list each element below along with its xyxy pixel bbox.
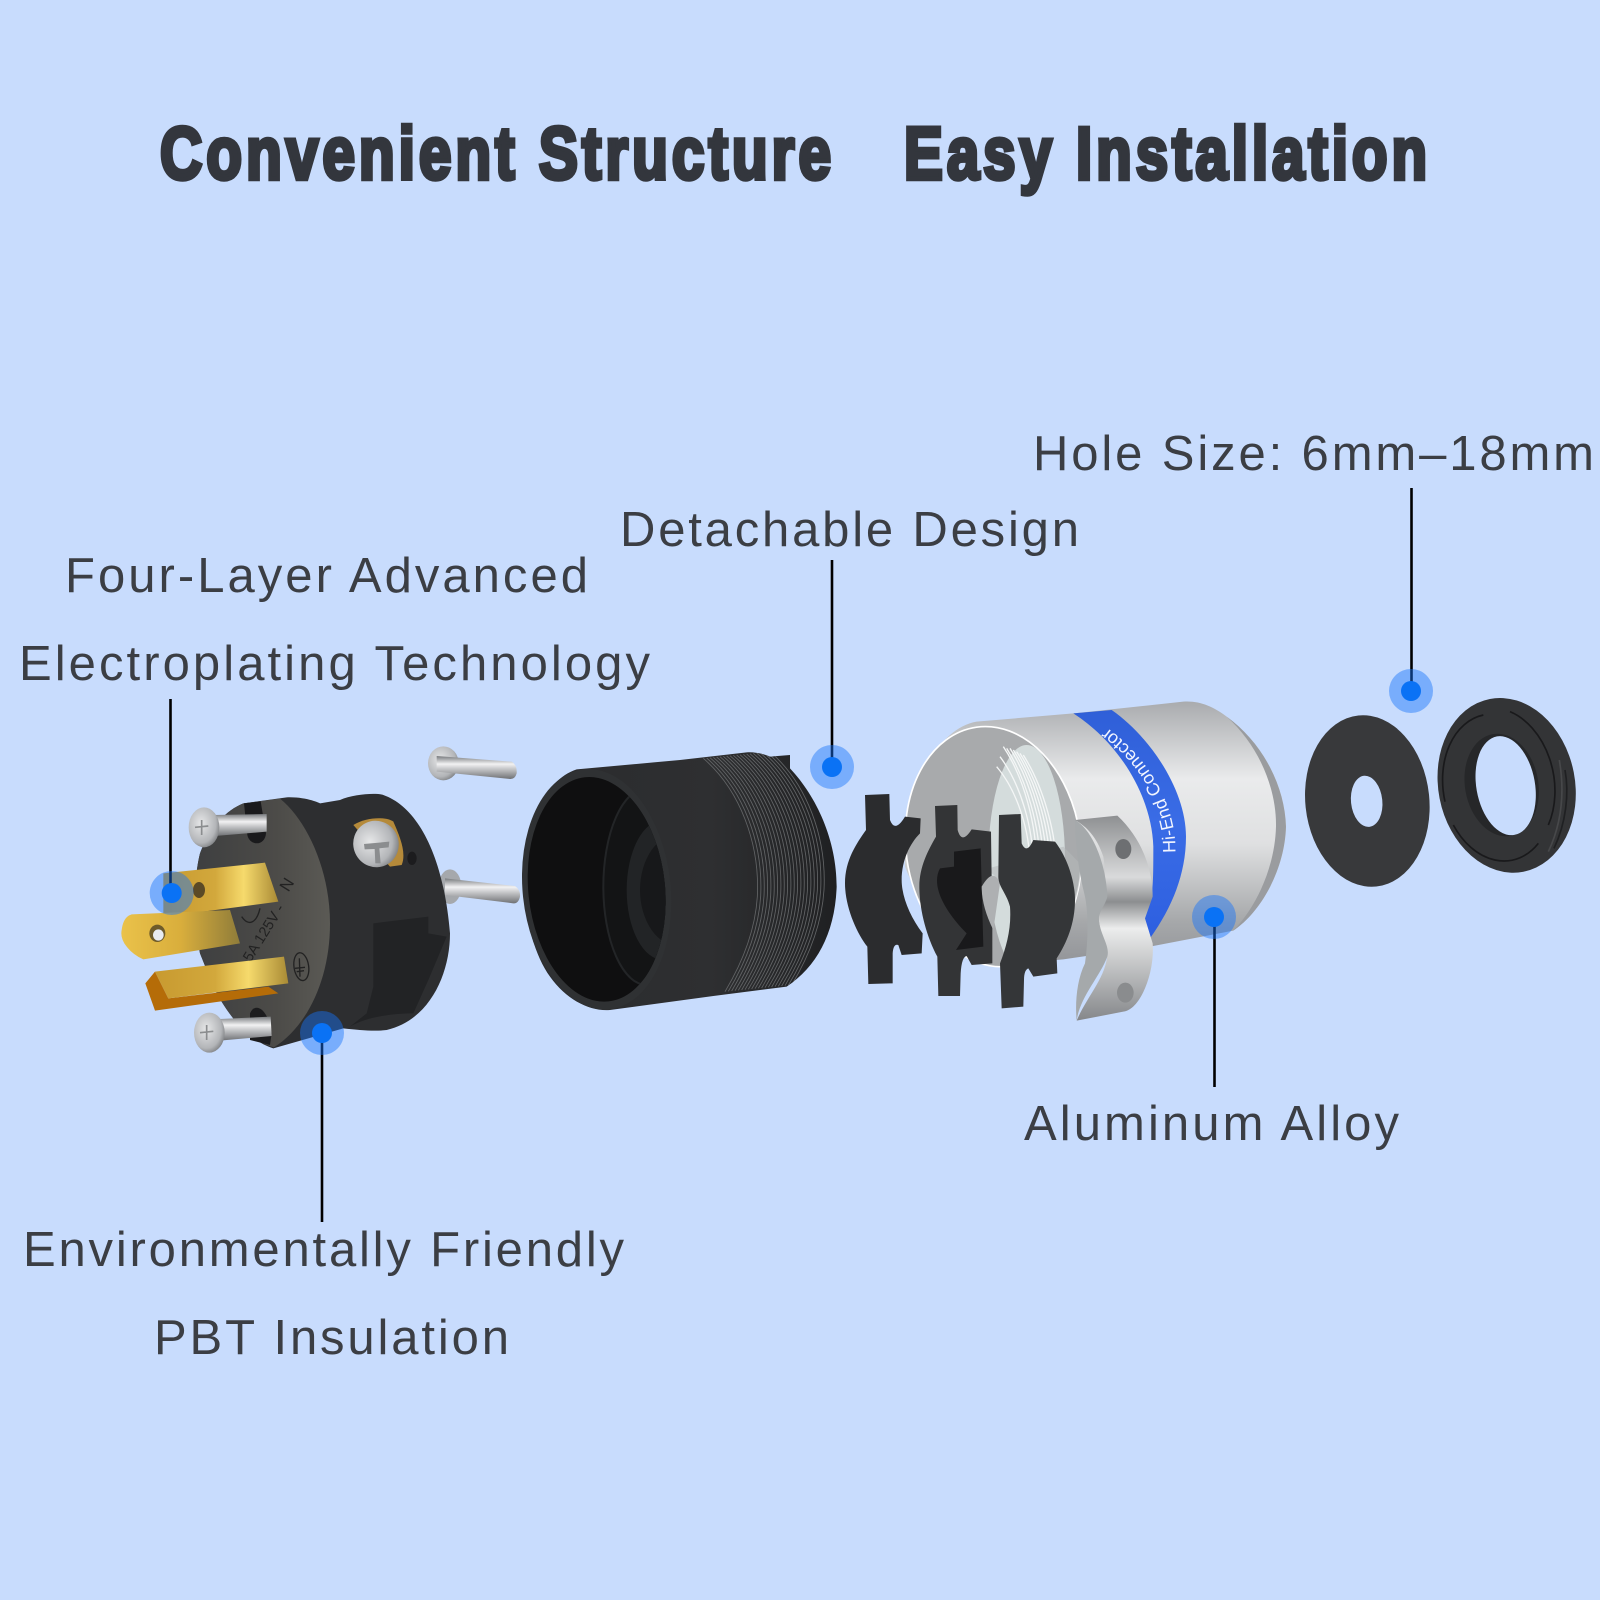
title xyxy=(160,112,1431,195)
ring hole xyxy=(1468,731,1543,840)
label text: Environmentally Friendly xyxy=(23,1223,624,1277)
plug rear housing xyxy=(195,794,450,1048)
label text xyxy=(23,1223,624,1365)
label text xyxy=(19,549,650,691)
front screw top xyxy=(189,807,267,847)
heading: Convenient Structure: Convenient Structure xyxy=(160,112,835,195)
product: plug body with prongs and screws xyxy=(121,746,520,1053)
label text: Hole Size: 6mm–18mm xyxy=(1033,427,1594,481)
callout: aluminum alloy xyxy=(1024,895,1400,1151)
terminal screw xyxy=(346,813,417,875)
band text path xyxy=(1075,708,1175,853)
heading: Easy Installation: Easy Installation xyxy=(904,112,1431,195)
product: threaded end ring xyxy=(1423,686,1591,885)
label text: Detachable Design xyxy=(620,503,1079,557)
silver clamp strap xyxy=(1075,816,1153,1021)
callout: PBT insulation xyxy=(23,1011,624,1365)
shell opening xyxy=(890,715,1097,978)
face markings xyxy=(242,908,311,982)
ring inner bevel xyxy=(1457,728,1547,842)
leader line xyxy=(1410,488,1413,691)
leader line xyxy=(321,1033,323,1222)
prong: live xyxy=(121,910,240,959)
marker dot xyxy=(1389,669,1433,713)
clamp insert three xyxy=(998,814,1075,1008)
shell body xyxy=(905,702,1286,960)
rating text on plug: 5A 125V - xyxy=(240,902,288,965)
leader line xyxy=(1213,917,1216,1087)
infographic canvas xyxy=(23,122,1591,1354)
ring grooves xyxy=(1443,712,1567,861)
inner rings xyxy=(602,796,666,984)
plug front face xyxy=(195,799,330,1047)
front screw bottom xyxy=(194,1013,272,1053)
loose screw lower xyxy=(439,869,520,904)
label text: Aluminum Alloy xyxy=(1024,1097,1400,1151)
leader line xyxy=(169,699,172,893)
tube opening xyxy=(517,770,676,1009)
tube front rim xyxy=(510,762,683,1017)
thread ridges xyxy=(703,752,824,992)
marker dot xyxy=(150,871,194,915)
product: flat rubber washer xyxy=(1297,709,1438,893)
tube body xyxy=(523,752,837,1010)
strap screw holes xyxy=(1115,839,1131,859)
product: aluminum shell with blue band xyxy=(845,702,1286,1021)
callout: detachable design xyxy=(620,503,1079,789)
screw wells xyxy=(244,801,266,843)
label text: PBT Insulation xyxy=(154,1311,509,1365)
callout: hole size xyxy=(1033,427,1594,713)
band text: Hi-End Connector xyxy=(1102,730,1176,852)
label text: Four-Layer Advanced xyxy=(65,549,588,603)
marker dot xyxy=(300,1011,344,1055)
prong: ground xyxy=(145,957,288,1011)
clamp insert one xyxy=(845,794,923,984)
shell rear bevel xyxy=(1227,717,1286,931)
label text: Electroplating Technology xyxy=(19,637,650,691)
leader line xyxy=(831,560,833,767)
blue band xyxy=(1073,710,1186,937)
prong: neutral xyxy=(163,863,278,917)
marker dot xyxy=(810,745,854,789)
neutral marking: N xyxy=(276,875,298,895)
clamp insert two xyxy=(919,805,1000,996)
housing recess xyxy=(350,917,447,1027)
callout: four-layer electroplating xyxy=(19,549,650,915)
product: threaded black tube xyxy=(510,752,837,1017)
marker dot xyxy=(1192,895,1236,939)
ring edge xyxy=(1423,686,1591,885)
loose screw upper xyxy=(428,746,517,780)
inner threads xyxy=(990,745,1080,952)
